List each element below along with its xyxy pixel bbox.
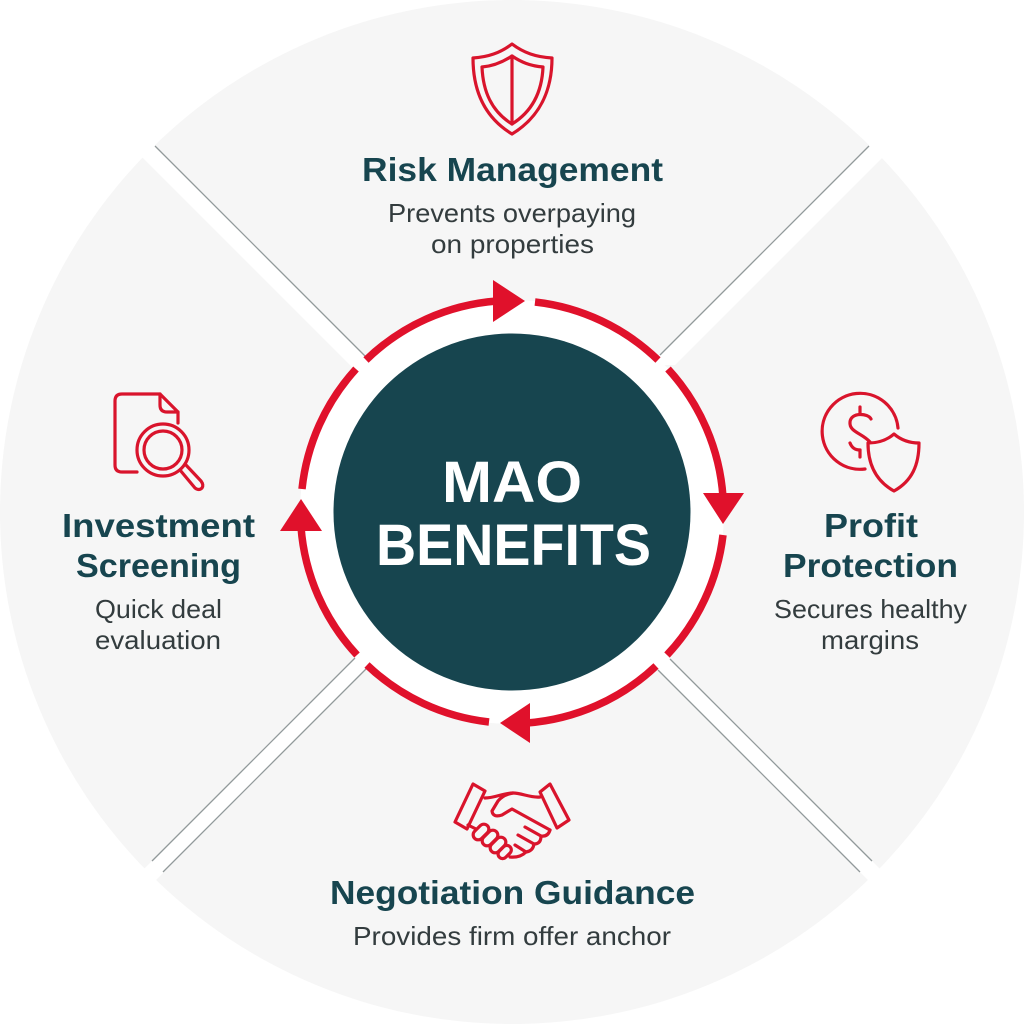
panel: profit protection: margins xyxy=(821,625,919,655)
panel: investment screening: Quick deal xyxy=(95,594,222,624)
panel: investment screening: Investment xyxy=(62,507,255,544)
icon: shield xyxy=(473,44,552,134)
panel: investment screening: evaluation xyxy=(95,625,221,655)
panel: investment screening: Screening xyxy=(76,547,241,584)
panel: risk management: Prevents overpaying xyxy=(388,198,636,228)
center title: MAO xyxy=(442,450,582,515)
diagonal divider lines xyxy=(152,146,872,872)
center title xyxy=(376,450,651,578)
center circle xyxy=(334,334,690,690)
red cycle arrows xyxy=(280,280,744,743)
panel: risk management: Risk Management xyxy=(362,151,663,188)
center title: BENEFITS xyxy=(376,513,651,578)
panel: negotiation guidance xyxy=(330,874,695,951)
white ring behind the arrows xyxy=(300,300,724,724)
icon: handshake xyxy=(455,784,569,860)
icon: document with magnifier xyxy=(115,394,203,490)
panel: profit protection xyxy=(774,507,967,655)
panel: investment screening xyxy=(62,507,255,655)
panel: risk management xyxy=(362,151,663,259)
white diagonal gaps between the four panels xyxy=(100,65,975,962)
icon: dollar coin with shield xyxy=(822,393,919,491)
panel: profit protection: Secures healthy xyxy=(774,594,967,624)
panel: profit protection: Protection xyxy=(783,547,958,584)
panel: profit protection: Profit xyxy=(824,507,918,544)
panel: risk management: on properties xyxy=(431,229,594,259)
panel: negotiation guidance: Negotiation Guidance xyxy=(330,874,695,911)
panel: negotiation guidance: Provides firm offer anchor xyxy=(353,921,671,951)
